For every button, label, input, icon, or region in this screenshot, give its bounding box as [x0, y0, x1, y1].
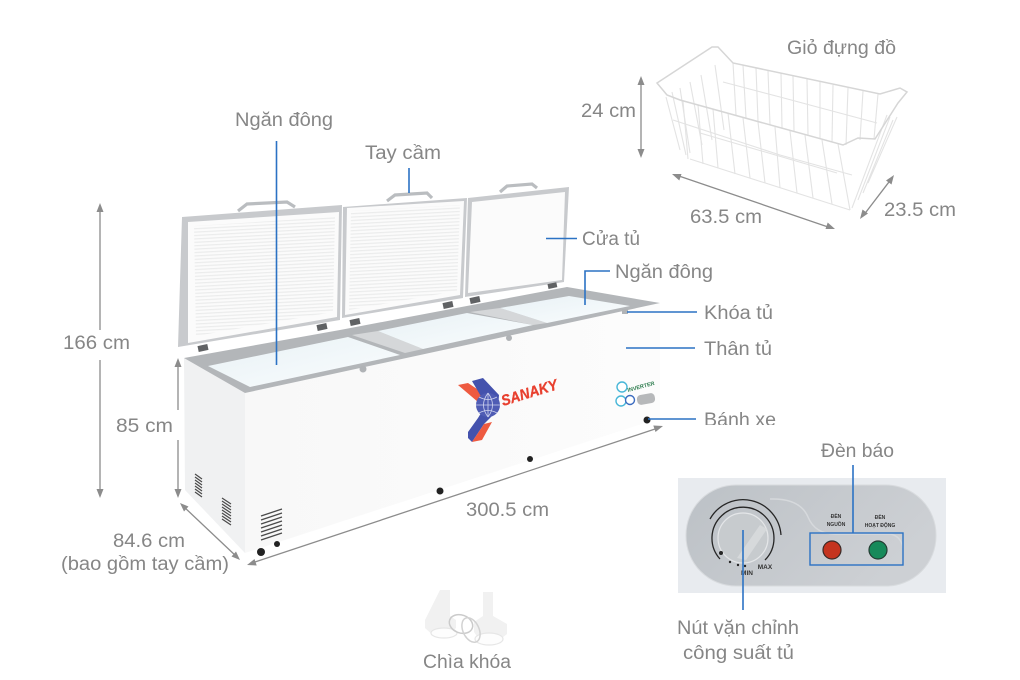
label: knob: Nút vặn chỉnh [677, 618, 799, 639]
dial: MIN [741, 570, 753, 577]
label: depth: 84.6 cm [113, 531, 185, 552]
callout line: lamp [852, 465, 854, 533]
label: depth [61, 531, 229, 575]
panel background [678, 478, 946, 593]
inverter badge: INVERTER [627, 381, 655, 394]
callout line: left compartment [276, 141, 278, 365]
dial: MAX [758, 564, 773, 571]
basket back wall [723, 63, 878, 145]
lid handles [238, 184, 537, 211]
callout line: handle [408, 168, 410, 193]
label: keys: Chìa khóa [423, 652, 511, 673]
label: left compartment: Ngăn đông [235, 110, 333, 131]
freezer body front [245, 303, 660, 553]
callout line: lock [627, 311, 697, 313]
panel pill [686, 485, 936, 586]
Sanaky logo [458, 376, 561, 442]
label: body height: 85 cm [116, 416, 173, 437]
hinges [197, 282, 557, 352]
lid middle [342, 198, 467, 318]
basket rim [657, 47, 907, 145]
lid left [178, 205, 342, 347]
rim [184, 287, 660, 393]
power lamp: NGUỒN [827, 521, 846, 528]
wire basket [657, 47, 907, 210]
label: basket width: 23.5 cm [884, 200, 956, 221]
dimension arrow: depth [180, 503, 240, 560]
callout line: body [626, 347, 695, 349]
dimension arrow: total height [96, 203, 104, 498]
freezer [178, 184, 660, 556]
label: knob: công suất tủ [683, 643, 794, 664]
label: depth: (bao gồm tay cầm) [61, 554, 229, 575]
compartment openings [208, 296, 630, 387]
basket right side [852, 115, 897, 208]
vents [195, 474, 282, 540]
control panel [678, 478, 946, 593]
label: basket: Giỏ đựng đồ [787, 38, 896, 59]
dimension arrow: basket length [672, 174, 835, 229]
label: door: Cửa tủ [582, 229, 640, 250]
label: basket height: 24 cm [581, 101, 636, 122]
label: total height: 166 cm [63, 333, 130, 354]
label: lock: Khóa tủ [704, 303, 773, 324]
dimension arrow: width [247, 426, 663, 566]
power lamp [823, 512, 846, 559]
brand name: SANAKY [499, 376, 561, 410]
label: right compartment: Ngăn đông [615, 262, 713, 283]
panel raised curve [770, 499, 903, 548]
callout line: right compartment [585, 271, 610, 305]
label: handle: Tay cầm [365, 143, 441, 164]
locks [360, 309, 628, 372]
compartment dividers [352, 308, 547, 353]
dimension arrow: basket height [638, 76, 644, 158]
label: wheel: Bánh xe [704, 410, 776, 431]
power lamp: ĐÈN [831, 512, 842, 520]
callout line: wheel [648, 418, 696, 420]
freezer body side [184, 358, 245, 553]
label: basket length: 63.5 cm [690, 207, 762, 228]
callout line: knob [742, 530, 744, 610]
globe [476, 393, 500, 417]
label: lamp: Đèn báo [821, 441, 894, 462]
basket left side [666, 65, 724, 155]
keys [425, 590, 507, 645]
callout line: door [546, 238, 577, 240]
inverter badge [616, 381, 656, 406]
lid right [465, 187, 569, 297]
label: width: 300.5 cm [466, 500, 549, 521]
operation lamp [865, 513, 895, 559]
dial [710, 500, 781, 577]
operation lamp: HOẠT ĐỘNG [865, 521, 895, 529]
label: body: Thân tủ [704, 339, 772, 360]
dimension arrow: basket width [860, 175, 894, 219]
lamp highlight box [810, 533, 903, 565]
wheels [257, 416, 650, 556]
dimension arrow: body height [174, 358, 182, 498]
operation lamp: ĐÈN [875, 513, 886, 521]
label: knob [677, 618, 799, 664]
basket front wall [673, 101, 852, 210]
